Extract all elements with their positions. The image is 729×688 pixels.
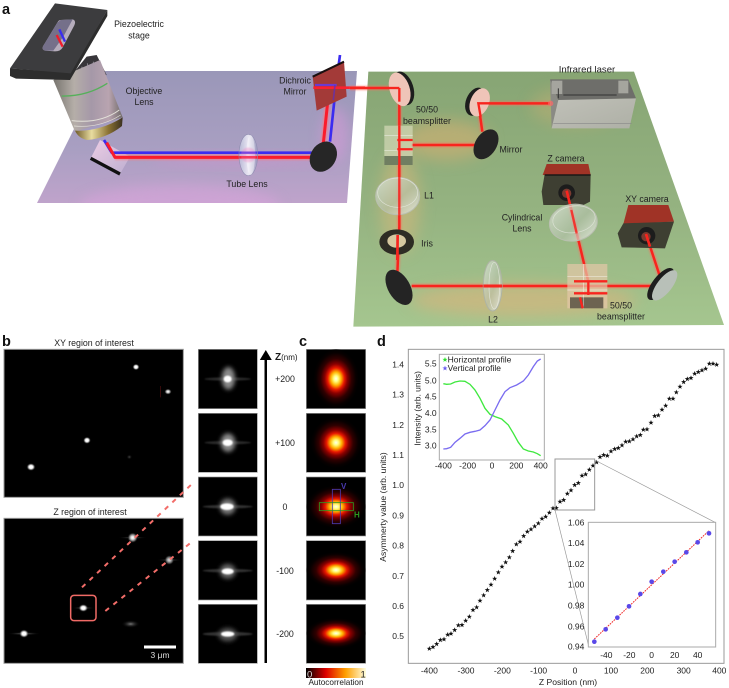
Z value -100: -100 [276,566,294,576]
blue and red beams, objective to dichroic [104,55,340,157]
main x axis ticks: 200 [640,665,655,675]
panel d: asymmetry plot [377,334,727,687]
inset x ticks: 0 [490,460,495,470]
PSF crop +200 [198,349,257,409]
panel label c: c [299,334,307,350]
label: piezoelectric stage: stage [128,30,150,40]
prism under objective [91,140,130,174]
label: dichroic mirror: Dichroic [279,76,311,86]
Z camera [542,164,591,210]
label: upper beamsplitter: 50/50 [416,104,438,114]
dichroic mirror [313,62,365,111]
label: cylindrical lens: Cylindrical [502,212,542,222]
fit inset y ticks: 1.02 [568,559,585,569]
fit inset y ticks: 1.00 [568,580,585,590]
main x axis ticks: -300 [458,665,475,675]
inset frame [439,354,544,460]
fit inset x ticks [600,650,703,660]
beamsplitter cube upper [384,126,413,165]
autocorrelation +100 [306,413,366,472]
asymmetry data stars [427,361,719,651]
bottom-left mirror [380,265,418,310]
heading: Z region of interest: Z region of interest [53,507,127,517]
purple optical breadboard [37,71,357,203]
panel b: region of interest images [2,334,257,663]
main x axis ticks: 400 [712,665,727,675]
XY image [4,349,183,497]
main y axis ticks: 0.8 [392,541,404,551]
label: objective lens: Lens [134,97,154,107]
infrared laser [548,79,636,128]
inset x ticks [435,460,548,470]
main y axis ticks: 0.5 [392,631,404,641]
inset y ticks: 4.5 [425,392,437,402]
PSF crop -200 [198,604,257,663]
label: infrared laser: Infrared laser [559,64,616,76]
PSF crop -100 [198,541,257,600]
tube lens [239,134,258,176]
fit inset y ticks: 1.04 [568,538,585,548]
dashed connector lines [82,483,193,611]
label: cylindrical lens: Lens [512,224,532,234]
red beam paths on green table [350,88,660,286]
Z value +200: +200 [275,374,295,384]
objective lens [53,55,123,140]
L2 lens [483,260,502,311]
inset y ticks: 3.0 [425,441,437,451]
main x axis ticks: 300 [677,665,691,675]
panel label a: a [2,2,11,18]
label: mirror: Mirror [500,144,523,154]
main y axis ticks: 0.6 [392,601,404,611]
inset x ticks: 200 [509,460,524,470]
panel label d: d [377,334,386,350]
inset y ticks: 4.0 [425,408,437,418]
panel a: optical setup [2,2,724,327]
label: upper beamsplitter: beamsplitter [403,116,451,126]
colorbar label: Autocorrelation [308,678,364,687]
panel c: autocorrelation maps [299,334,366,687]
inset x ticks: -400 [435,460,452,470]
label: L2: L2 [488,314,498,324]
fit inset x ticks: 20 [670,650,680,660]
colorbar: 0 [307,670,312,680]
PSF crop +100 [198,413,257,472]
green optical breadboard [353,72,724,327]
label: piezoelectric stage: Piezoelectric [114,19,164,29]
beamsplitter mirror top [385,69,418,109]
colorbar: 1 [360,670,366,680]
beamsplitter cube lower [567,264,607,308]
XY path mirror [642,264,682,304]
fit inset frame [588,522,716,647]
scale bar [144,646,176,660]
label: XY camera: XY camera [625,194,669,204]
scale bar: 3 μm [150,650,170,660]
fit inset y ticks: 0.94 [568,641,585,651]
vertical profile curve [443,359,541,449]
main y axis ticks: 1.4 [392,360,404,370]
inset y ticks: 3.5 [425,424,437,434]
main x axis ticks: -400 [421,665,438,675]
main x axis ticks [421,665,727,675]
inset y ticks: 5.0 [425,375,437,385]
laser steering mirror [461,85,494,119]
green table components [376,69,682,311]
legend [442,355,512,373]
main y axis ticks: 1.3 [392,390,404,400]
label: Z camera: Z camera [547,154,585,164]
autocorrelation -100 [306,541,366,600]
inset x ticks: -200 [459,460,476,470]
fit inset x ticks: -20 [623,650,636,660]
zoom region box and connector lines [555,459,715,647]
main y axis ticks: 0.9 [392,510,404,520]
fit inset y ticks [568,517,585,651]
main x axis ticks: 100 [604,665,618,675]
fit inset y ticks: 0.98 [568,601,585,611]
PSF crop 0 [198,477,257,536]
main x axis title: Z Position (nm) [539,677,597,687]
main plot frame [408,349,724,663]
inset y title: Intensity (arb. units) [413,371,423,446]
iris [379,229,414,260]
piezoelectric stage [10,3,107,80]
main y axis ticks: 1.2 [392,420,404,430]
label: tube lens: Tube Lens [226,179,268,189]
autocorrelation -200 [306,604,366,663]
Z axis title: Z(nm) [275,352,298,363]
legend: Vertical profile [448,363,501,373]
legend: Horizontal profile [448,355,512,365]
inset y ticks [425,359,437,451]
Z axis arrow [260,350,272,663]
inset x ticks: 400 [534,460,548,470]
colorbar [306,668,366,680]
main y axis title: Asymmerty value (arb. units) [378,452,388,562]
fit inset y ticks: 1.06 [568,517,585,527]
autocorrelation 0 with V and H boxes: H [354,510,360,519]
Z image [4,518,183,663]
fit inset x ticks: 40 [693,650,703,660]
autocorrelation +200 [306,349,366,409]
horizontal profile curve [443,381,541,456]
fit inset x ticks: 0 [649,650,654,660]
Z value 0: 0 [283,502,288,512]
fit inset x ticks: -40 [600,650,613,660]
main y axis ticks: 0.7 [392,571,404,581]
Z value +100: +100 [275,438,295,448]
fit inset y ticks: 0.96 [568,622,585,632]
label: iris: Iris [421,238,433,248]
inset y ticks: 5.5 [425,359,437,369]
panel label b: b [2,334,11,350]
main y axis ticks: 1.1 [392,450,404,460]
mirror [468,125,504,164]
main y axis ticks: 1.0 [392,480,404,490]
main y axis ticks [392,360,404,641]
label: dichroic mirror: Mirror [284,86,307,96]
label: objective lens: Objective [126,86,162,96]
main x axis ticks: -100 [530,665,547,675]
Z value -200: -200 [276,629,294,639]
label: lower beamsplitter: beamsplitter [597,312,645,322]
main x axis ticks: 0 [573,665,578,675]
L1 lens [376,177,420,215]
purple table mirror [304,136,343,177]
highlight box [71,595,96,621]
cylindrical lens [547,201,600,244]
heading: XY region of interest: XY region of interest [54,338,134,348]
inset: linear fit [568,517,716,660]
fit line and calibration points [592,531,711,644]
autocorrelation 0 with V and H boxes: V [341,482,347,491]
XY camera [618,205,674,248]
label: L1: L1 [424,190,434,200]
inset: intensity profile [413,354,548,470]
label: lower beamsplitter: 50/50 [610,300,632,310]
autocorrelation 0 with V and H boxes [306,477,366,536]
main x axis ticks: -200 [494,665,511,675]
